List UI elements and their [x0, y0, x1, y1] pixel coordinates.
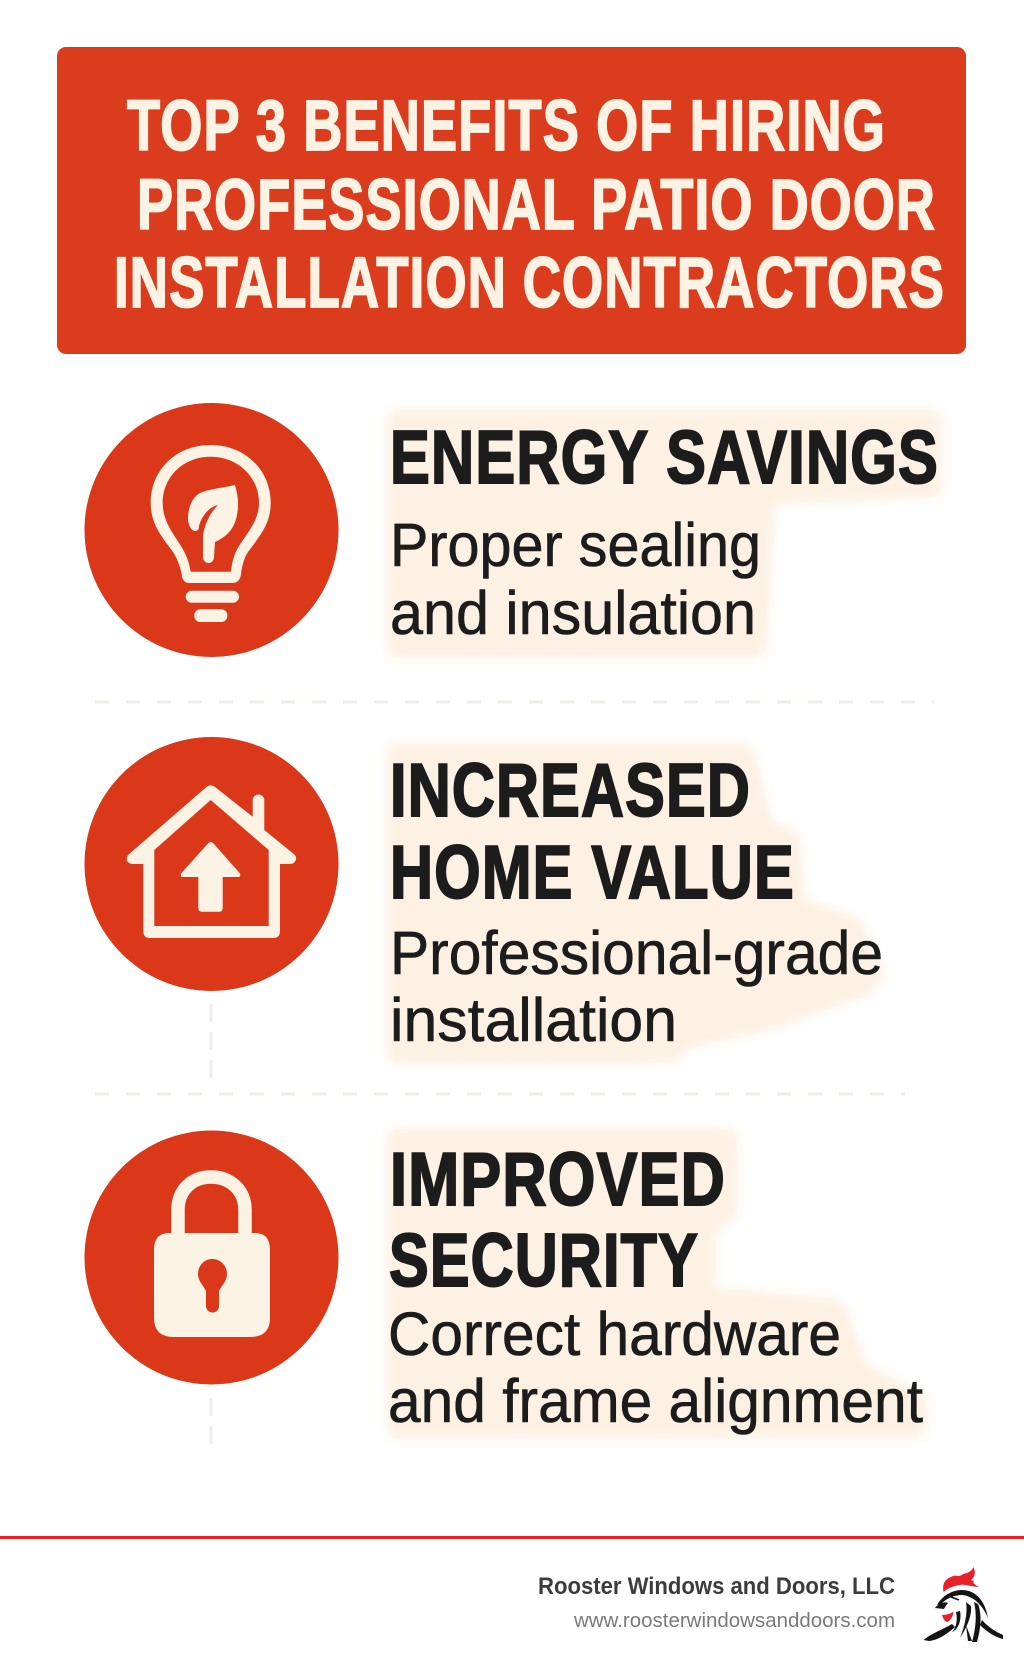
title banner [57, 47, 966, 354]
text: proper sealing and insulation: and insulation [390, 579, 756, 647]
footer red rule [0, 1536, 1024, 1539]
text: correct hardware and frame alignment [388, 1300, 923, 1435]
highlight: energy savings text background [387, 410, 942, 658]
heading: increased home value: HOME VALUE [390, 830, 795, 914]
icon: light bulb with leaf [84, 403, 338, 657]
text: correct hardware and frame alignment: and frame alignment [388, 1367, 923, 1435]
website url: www.roosterwindowsanddoors.com [573, 1610, 895, 1632]
text: professional-grade installation [390, 919, 883, 1054]
heading: increased home value: INCREASED [390, 748, 751, 832]
icon: rooster logo [924, 1567, 1003, 1642]
panel: energy savings [84, 403, 942, 658]
icon: house with up arrow [84, 737, 338, 991]
heading: improved security: SECURITY [389, 1218, 699, 1302]
highlight: security text background [387, 1128, 927, 1438]
panel: increased home value [84, 737, 886, 1064]
company name: Rooster Windows and Doors, LLC [538, 1573, 895, 1600]
text: proper sealing and insulation: Proper sealing [390, 511, 761, 579]
text: proper sealing and insulation [390, 511, 761, 647]
highlight: home value text background [387, 743, 886, 1064]
footer [0, 1536, 1024, 1642]
panel: improved security [84, 1128, 927, 1438]
heading: improved security: IMPROVED [390, 1137, 726, 1221]
text: professional-grade installation: Professional-grade [390, 919, 883, 987]
text: correct hardware and frame alignment: Correct hardware [388, 1300, 841, 1368]
heading: increased home value [390, 748, 795, 914]
icon: padlock [84, 1130, 338, 1384]
text: professional-grade installation: installation [390, 986, 677, 1054]
heading: improved security [389, 1137, 726, 1302]
